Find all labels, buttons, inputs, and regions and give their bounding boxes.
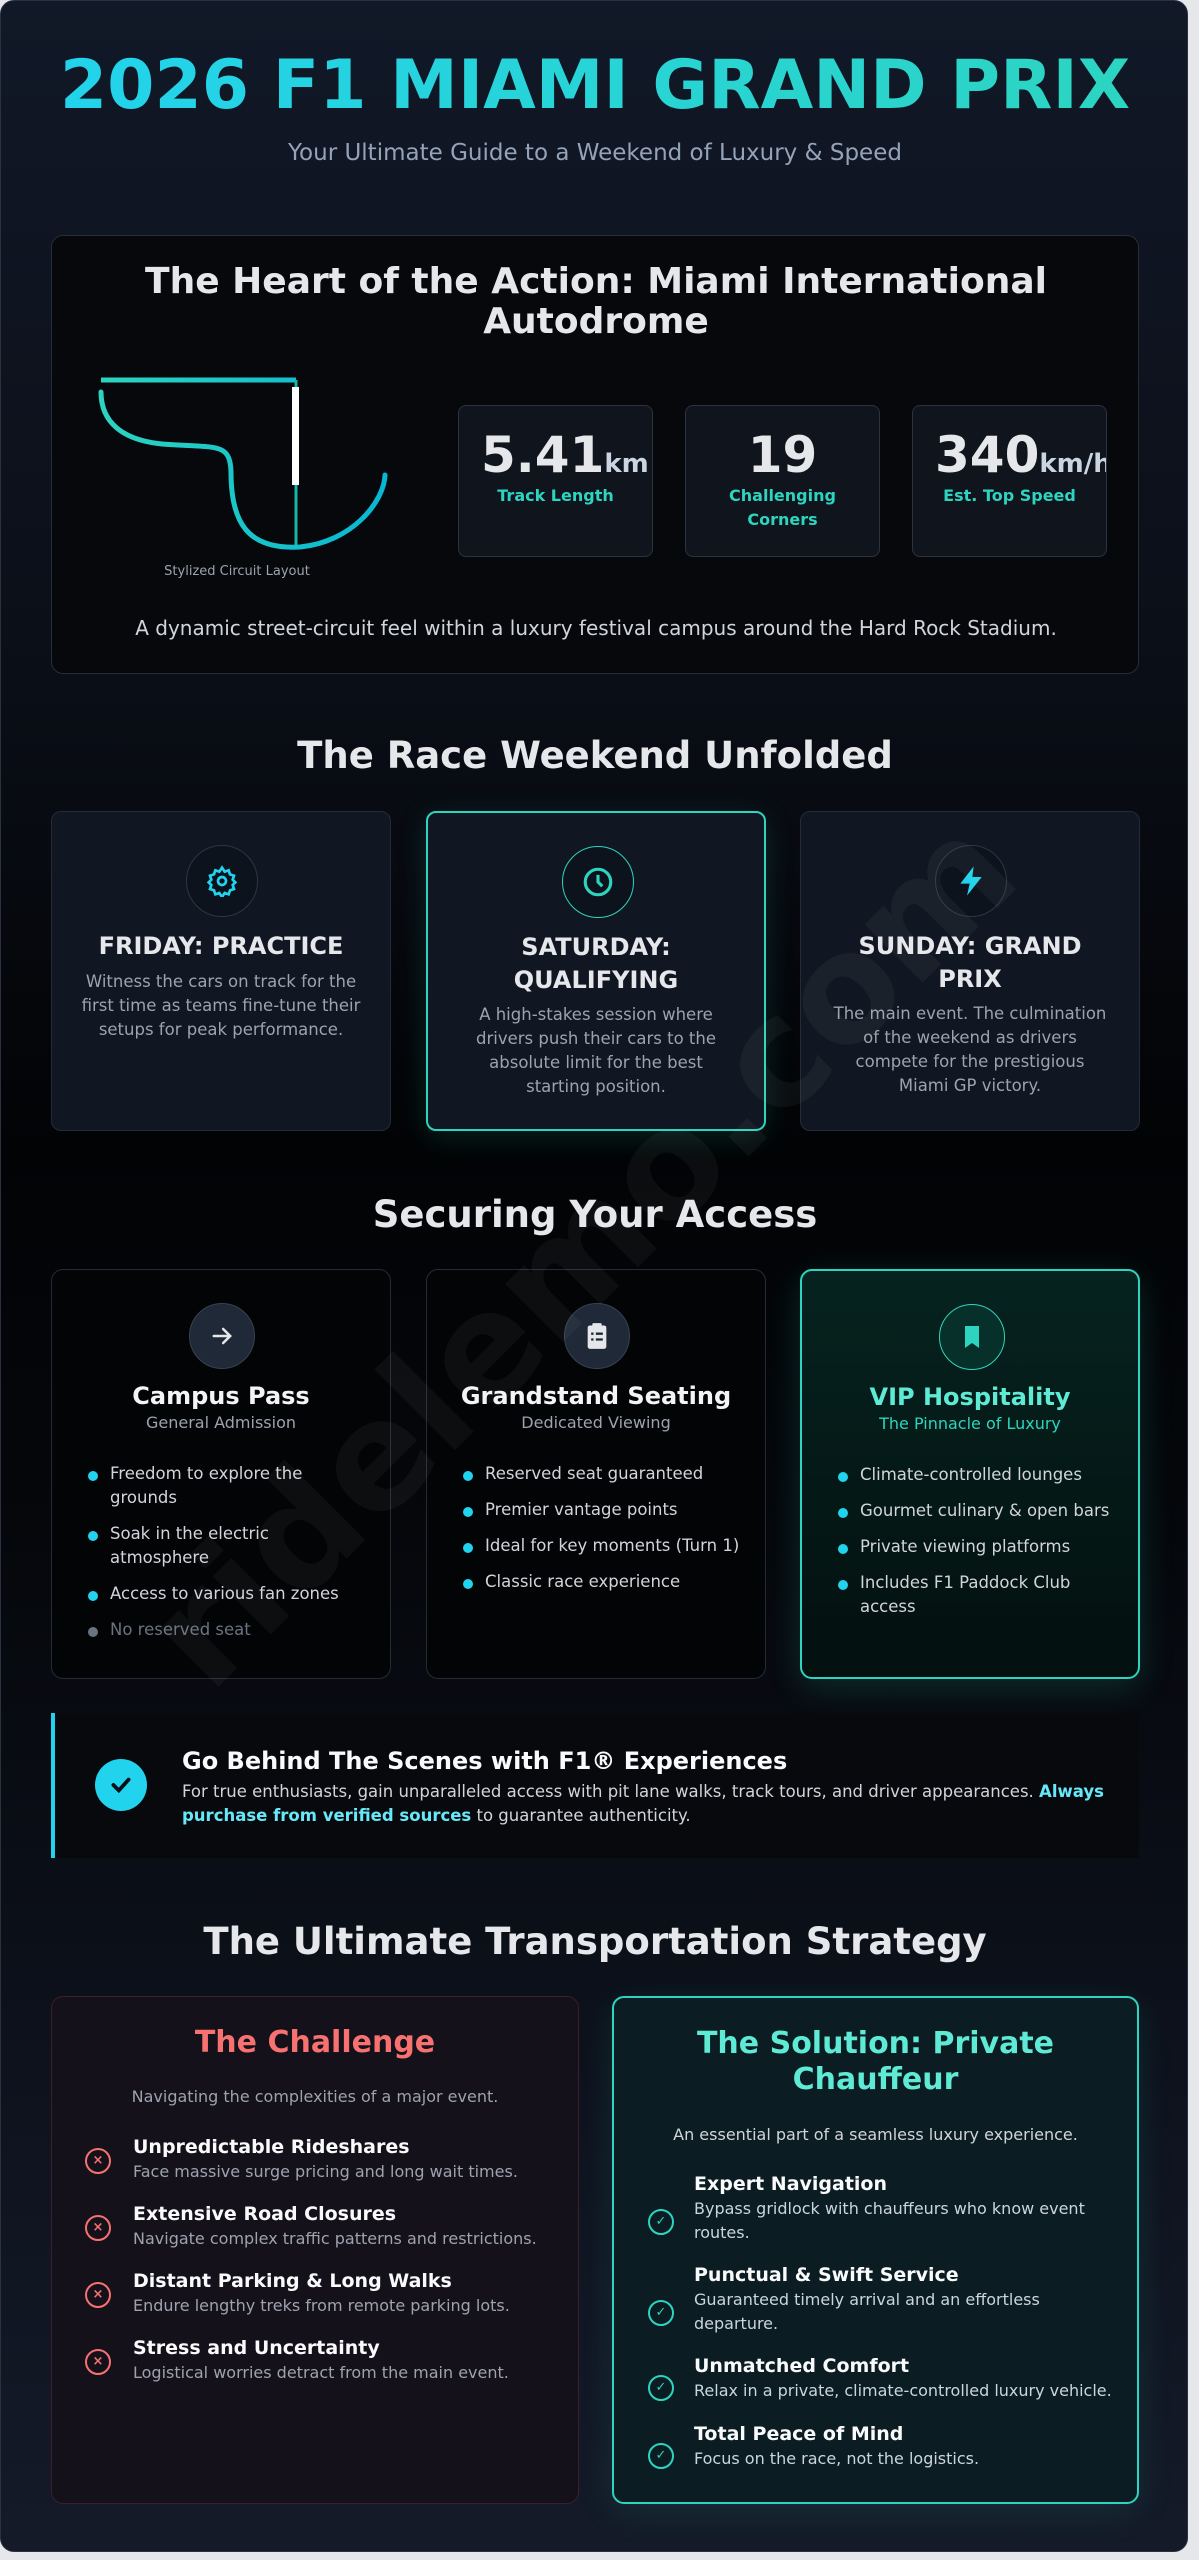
icon: bookmark: [939, 1304, 1005, 1370]
card: VIP: Private viewing platforms: [860, 1537, 1070, 1556]
icon: clock: [562, 846, 634, 918]
panel: challenge: [51, 1996, 579, 2504]
item: Punctual & Swift Service: [694, 2264, 959, 2286]
item: [85, 2337, 509, 2382]
panel: solution: Chauffeur: [793, 2062, 958, 2097]
card: VIP: Gourmet culinary & open bars: [860, 1501, 1109, 1520]
stat: track length: [458, 405, 653, 557]
stat: track length: Track Length: [497, 486, 614, 505]
card: grandstand: Grandstand Seating: [461, 1382, 731, 1410]
card: saturday: A high-stakes session where drivers push their cars to the absolute limit for the best starting position.: [476, 1005, 716, 1096]
callout text: For true enthusiasts, gain unparalleled access with pit lane walks, track tours, and driver appearances. Always purchase from verified sources to guarantee authenticity.: [182, 1782, 1104, 1825]
item: Expert Navigation: [694, 2173, 887, 2195]
card: campus pass: No reserved seat: [110, 1620, 251, 1639]
heading: circuit: Autodrome: [483, 301, 709, 342]
item: [85, 2136, 518, 2181]
icon: gear: [186, 845, 258, 917]
title: 2026 F1 MIAMI GRAND PRIX: [60, 46, 1130, 125]
description: A dynamic street-circuit feel within a luxury festival campus around the Hard Rock Stadium.: [135, 616, 1057, 640]
stat: corners: [685, 405, 880, 557]
heading: circuit: The Heart of the Action: Miami International: [145, 261, 1047, 302]
caption: Stylized Circuit Layout: [164, 564, 310, 579]
item: Total Peace of Mind: [694, 2423, 903, 2445]
panel: challenge: Navigating the complexities of a major event.: [132, 2087, 498, 2106]
card: grandstand: Premier vantage points: [485, 1500, 678, 1519]
card: VIP: The Pinnacle of Luxury: [879, 1414, 1061, 1433]
item: Unpredictable Rideshares: [133, 2136, 410, 2158]
stat: speed: [912, 405, 1107, 557]
card: VIP: Climate-controlled lounges: [860, 1465, 1082, 1484]
card: sunday: PRIX: [938, 965, 1002, 993]
card: grandstand: Dedicated Viewing: [521, 1413, 671, 1432]
card: friday: Witness the cars on track for the first time as teams fine-tune their setups for peak performance.: [82, 972, 360, 1039]
heading: access: Securing Your Access: [373, 1193, 817, 1236]
stat: track length: 5.41km: [481, 426, 649, 484]
panel: solution: ✓: [656, 2214, 666, 2229]
callout title: Go Behind The Scenes with F1® Experiences: [182, 1747, 787, 1775]
card: campus pass: Access to various fan zones: [110, 1584, 339, 1603]
panel: challenge: ×: [93, 2153, 103, 2168]
item: Logistical worries detract from the main event.: [133, 2363, 509, 2382]
card: campus pass: [51, 1269, 391, 1679]
panel: solution: ✓: [656, 2305, 666, 2320]
item: Face massive surge pricing and long wait times.: [133, 2162, 518, 2181]
panel: solution: The Solution: Private: [697, 2026, 1054, 2061]
item: Navigate complex traffic patterns and restrictions.: [133, 2229, 537, 2248]
card: grandstand: [426, 1269, 766, 1679]
stat: corners: 19: [748, 426, 817, 484]
item: [648, 2173, 1085, 2242]
item: Relax in a private, climate-controlled luxury vehicle.: [694, 2381, 1112, 2400]
item: Stress and Uncertainty: [133, 2337, 380, 2359]
card: sunday: [800, 811, 1140, 1131]
item: Distant Parking & Long Walks: [133, 2270, 452, 2292]
item: [648, 2355, 1112, 2401]
panel: solution: ✓: [656, 2448, 666, 2463]
item: [648, 2264, 1040, 2333]
item: [85, 2203, 537, 2248]
panel: challenge: The Challenge: [195, 2025, 435, 2060]
card: grandstand: Reserved seat guaranteed: [485, 1464, 703, 1483]
card: VIP: VIP Hospitality: [870, 1383, 1070, 1411]
card: VIP: Includes F1 Paddock Club access: [860, 1573, 1070, 1616]
panel: solution: ✓: [656, 2380, 666, 2395]
panel: solution: [612, 1996, 1139, 2504]
stat: corners: Corners: [747, 510, 818, 529]
card: saturday: [426, 811, 766, 1131]
card: campus pass: Campus Pass: [132, 1382, 310, 1410]
stat: corners: Challenging: [729, 486, 836, 505]
card: grandstand: Ideal for key moments (Turn 1): [485, 1536, 739, 1555]
heading: transportation: The Ultimate Transportation Strategy: [203, 1920, 987, 1963]
card: friday: FRIDAY: PRACTICE: [99, 932, 343, 960]
heading: circuit: [145, 261, 1047, 342]
icon: arrow: [189, 1303, 255, 1369]
item: Extensive Road Closures: [133, 2203, 396, 2225]
item: Guaranteed timely arrival and an effortless departure.: [694, 2290, 1040, 2333]
card: campus pass: Freedom to explore the grounds: [110, 1464, 302, 1507]
panel: circuit: [51, 235, 1139, 674]
circuit map: [98, 378, 388, 550]
card: saturday: QUALIFYING: [514, 966, 678, 994]
subtitle: Your Ultimate Guide to a Weekend of Luxury & Speed: [288, 140, 902, 166]
icon: bolt: [935, 845, 1007, 917]
watermark: ridelemo.com: [112, 783, 1050, 1721]
card: VIP: [800, 1269, 1140, 1679]
panel: challenge: ×: [93, 2220, 103, 2235]
panel: solution: An essential part of a seamless luxury experience.: [673, 2125, 1078, 2144]
icon: clipboard: [564, 1303, 630, 1369]
item: [85, 2270, 510, 2315]
item: [648, 2423, 979, 2469]
card: saturday: SATURDAY:: [521, 933, 671, 961]
heading: race weekend: The Race Weekend Unfolded: [297, 734, 893, 777]
card: grandstand: Classic race experience: [485, 1572, 680, 1591]
icon: check: [95, 1759, 147, 1811]
item: Unmatched Comfort: [694, 2355, 909, 2377]
panel: challenge: ×: [93, 2354, 103, 2369]
card: sunday: SUNDAY: GRAND: [858, 932, 1082, 960]
item: Focus on the race, not the logistics.: [694, 2449, 979, 2468]
stat: speed: Est. Top Speed: [943, 486, 1076, 505]
card: campus pass: Soak in the electric atmosphere: [110, 1524, 269, 1567]
card: friday: [51, 811, 391, 1131]
callout: F1 experiences: [51, 1713, 1139, 1858]
panel: challenge: ×: [93, 2287, 103, 2302]
card: campus pass: General Admission: [146, 1413, 296, 1432]
item: Bypass gridlock with chauffeurs who know event routes.: [694, 2199, 1085, 2242]
item: Endure lengthy treks from remote parking lots.: [133, 2296, 510, 2315]
card: sunday: The main event. The culmination of the weekend as drivers compete for the prestigious Miami GP victory.: [834, 1004, 1106, 1095]
